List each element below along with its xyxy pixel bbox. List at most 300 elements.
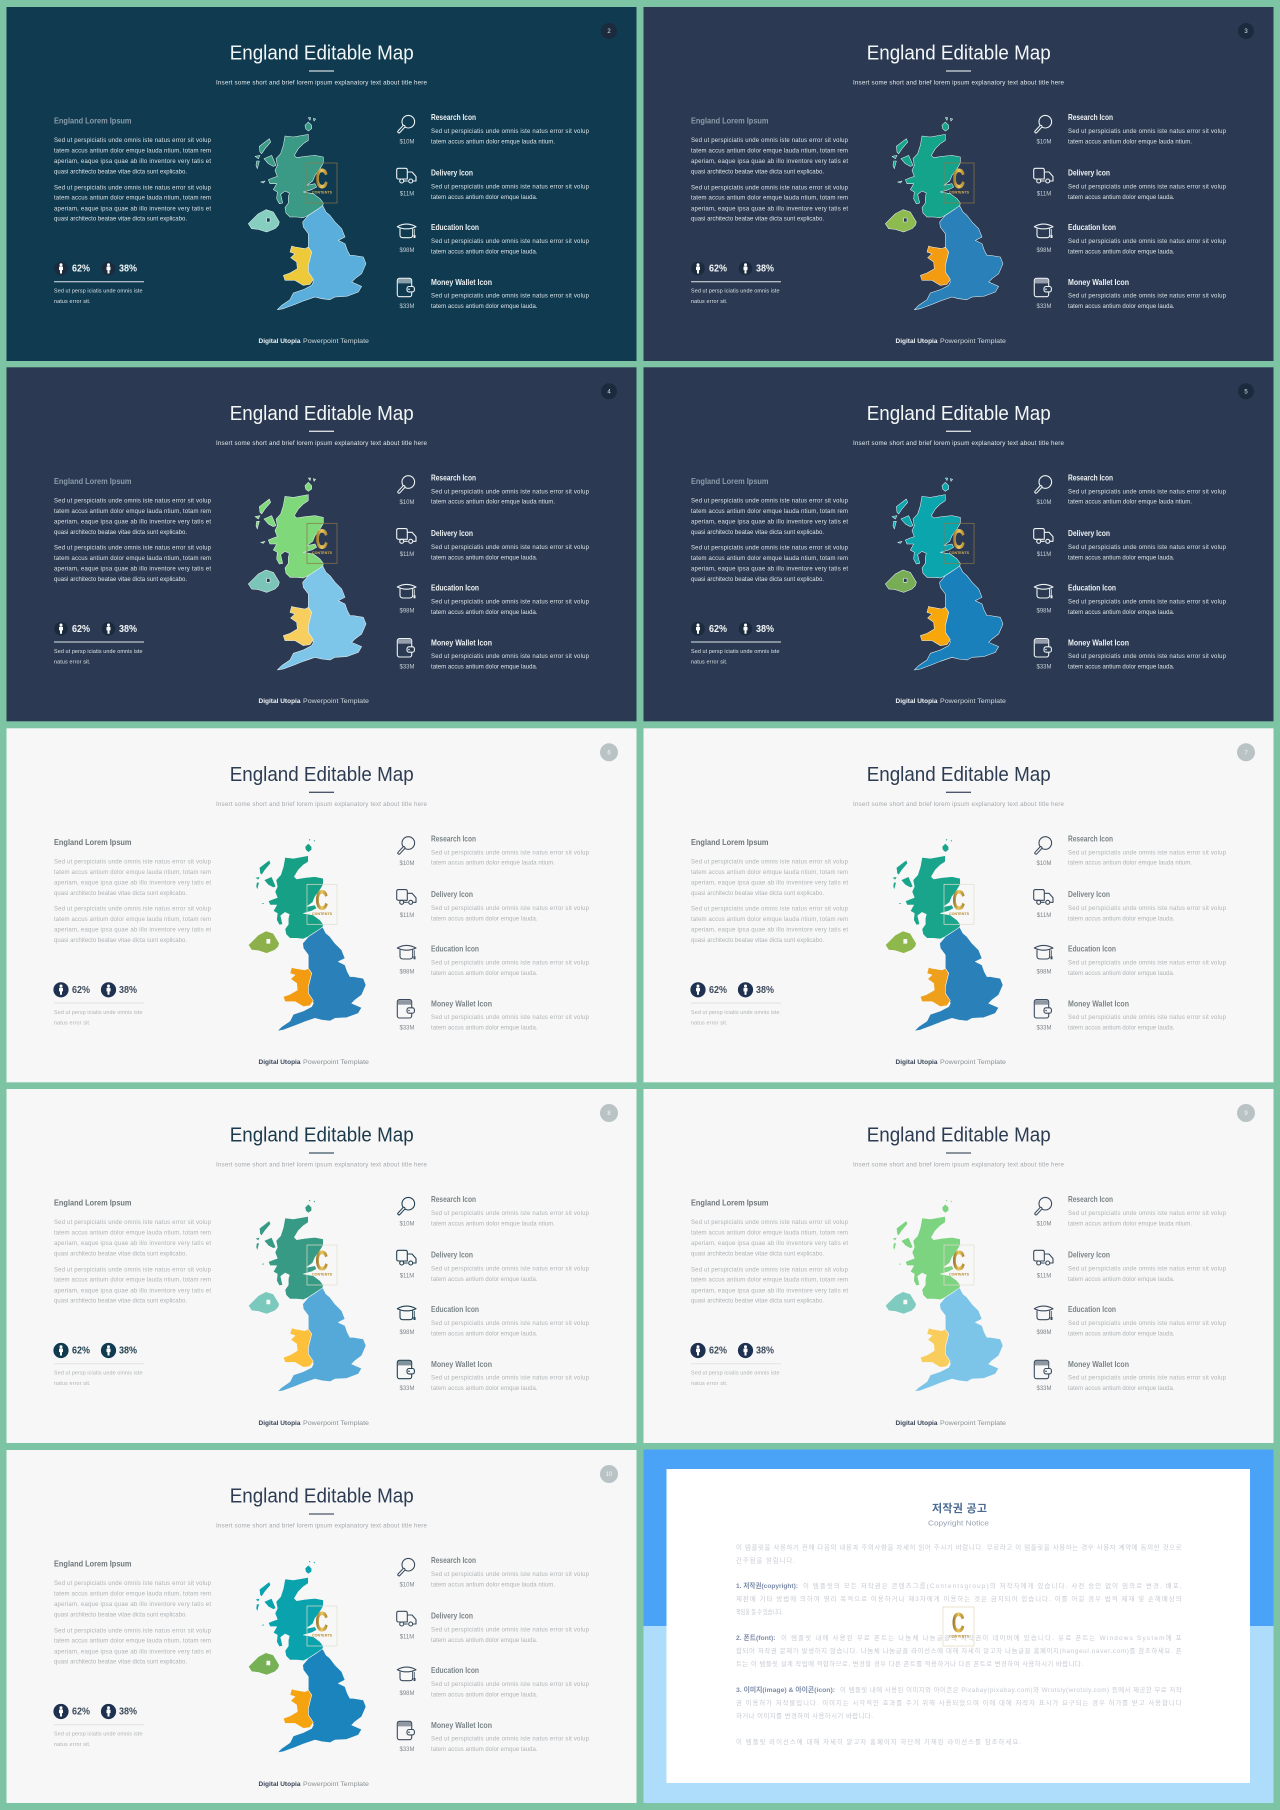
stats note: natus error sit. <box>691 299 728 305</box>
map of the UK <box>248 1561 366 1753</box>
footer: Powerpoint Template <box>303 1420 369 1427</box>
item: research: tatem accus antium dolor emque lauda ntium. <box>1068 1221 1192 1227</box>
item: education <box>397 1666 590 1699</box>
left paragraphs: quasi architecto beatae vitae dicta sunt explicabo. <box>691 891 824 897</box>
gender stats: 62% <box>709 262 728 274</box>
left paragraphs: Sed ut perspiciatis unde omnis iste natus error sit volup <box>54 1267 212 1273</box>
map of the UK <box>248 1200 366 1392</box>
stats note <box>54 649 142 665</box>
footer <box>896 338 1006 345</box>
left paragraphs: tatem accus antium dolor emque lauda ntium, totam rem <box>54 1639 211 1645</box>
item: education: Education Icon <box>431 583 479 592</box>
gender stats: 62% <box>709 623 728 635</box>
item: education: tatem accus antium dolor emque lauda. <box>431 1332 538 1338</box>
clause 2: font: 함되어 저작권 문제가 발생하지 않습니다. 나눔체 나눔글꼴 라이선스에 대해 자세히 알고자 나눔글꼴 홈페이지(hangeul.naver.com)를 참조하세요. 폰 <box>736 1646 1182 1655</box>
gender stats: 62% <box>72 262 91 274</box>
gender stats: 38% <box>119 1706 138 1718</box>
left paragraphs: aperiam, eaque ipsa quae ab illo inventore very tatis et <box>54 1288 211 1294</box>
footer: Powerpoint Template <box>303 338 369 345</box>
item: research: $10M <box>399 500 415 506</box>
item: delivery: tatem accus antium dolor emque lauda. <box>1068 916 1175 922</box>
stats note: Sed ut persp iciatis unde omnis iste <box>54 1370 142 1376</box>
clause 3: images and icons: 권 이용허가 저작물입니다. 이미지는 시각적인 효과를 주기 위해 사용되었으며 이에 대해 저작자 표시가 요구되는 경우 허가를 받고 사용합니다 <box>736 1698 1182 1707</box>
subtitle: Insert some short and brief lorem ipsum explanatory text about title here <box>853 1162 1065 1168</box>
item: delivery: Sed ut perspiciatis unde omnis iste natus error sit volup <box>1068 906 1227 912</box>
left paragraphs <box>691 859 849 944</box>
watermark <box>307 1606 337 1646</box>
watermark: CONTENTS <box>949 912 970 916</box>
page number badge <box>1238 23 1254 39</box>
item: delivery: tatem accus antium dolor emque lauda. <box>1068 555 1175 561</box>
gender stats: 38% <box>756 262 775 274</box>
page number badge: 3 <box>1244 29 1248 35</box>
item: money wallet <box>1034 278 1227 310</box>
watermark: CONTENTS <box>312 190 333 194</box>
item: research <box>1036 113 1227 146</box>
item: money wallet: Money Wallet Icon <box>431 1360 492 1369</box>
panel: slide 4, navy <box>6 367 636 721</box>
clause 3: images and icons: 하거나 이미지를 변경하여 사용하시기 바랍니다. <box>736 1711 873 1720</box>
watermark: C <box>316 1245 328 1276</box>
footer: Powerpoint Template <box>303 698 369 705</box>
watermark <box>307 523 337 563</box>
left paragraphs: aperiam, eaque ipsa quae ab illo inventore very tatis et <box>54 880 211 886</box>
left heading: England Lorem Ipsum <box>54 116 132 126</box>
footer: Powerpoint Template <box>940 698 1006 705</box>
left paragraphs: Sed ut perspiciatis unde omnis iste natus error sit volup <box>691 138 849 144</box>
footer: Digital Utopia <box>258 1781 301 1788</box>
left paragraphs: quasi architecto beatae vitae dicta sunt explicabo. <box>691 170 824 176</box>
watermark <box>943 1607 974 1646</box>
item: education: tatem accus antium dolor emque lauda. <box>1068 1332 1175 1338</box>
item: education: Sed ut perspiciatis unde omnis iste natus error sit volup <box>431 239 590 245</box>
watermark: C <box>316 884 328 915</box>
watermark: CONTENTS <box>949 551 970 555</box>
item: delivery: tatem accus antium dolor emque lauda. <box>431 555 538 561</box>
left paragraphs: tatem accus antium dolor emque lauda ntium, totam rem <box>691 870 848 876</box>
item: research <box>399 473 590 506</box>
gender stats <box>54 262 138 275</box>
item: research: $10M <box>399 140 415 146</box>
left paragraphs: quasi architecto beatae vitae dicta sunt explicabo. <box>54 170 187 176</box>
item: delivery: $11M <box>1037 552 1051 558</box>
gender stats <box>691 622 775 636</box>
item: delivery: tatem accus antium dolor emque lauda. <box>431 916 538 922</box>
left paragraphs: tatem accus antium dolor emque lauda ntium, totam rem <box>54 556 211 562</box>
gender stats: 38% <box>756 623 775 635</box>
left paragraphs: Sed ut perspiciatis unde omnis iste natus error sit volup <box>54 546 212 552</box>
gender stats <box>690 1343 775 1358</box>
watermark: CONTENTS <box>949 1634 970 1638</box>
item: delivery: $11M <box>400 552 414 558</box>
item: delivery: Sed ut perspiciatis unde omnis iste natus error sit volup <box>431 906 590 912</box>
map of the UK <box>248 478 366 670</box>
item: delivery <box>397 890 590 922</box>
item: research: Sed ut perspiciatis unde omnis iste natus error sit volup <box>1068 1211 1227 1217</box>
stats note: Sed ut persp iciatis unde omnis iste <box>691 1370 780 1376</box>
copyright subheading: Copyright Notice <box>928 1518 989 1528</box>
left paragraphs: aperiam, eaque ipsa quae ab illo inventore very tatis et <box>691 519 848 525</box>
left paragraphs <box>54 498 212 583</box>
gender stats <box>53 1704 138 1719</box>
item: research <box>1036 473 1227 506</box>
left paragraphs: quasi architecto beatae vitae dicta sunt explicabo. <box>54 217 187 223</box>
left paragraphs: Sed ut perspiciatis unde omnis iste natus error sit volup <box>691 859 849 865</box>
item: money wallet: Sed ut perspiciatis unde omnis iste natus error sit volup <box>431 1015 590 1021</box>
clause 1: copyright: 이 템플릿의 모든 저작권은 콘텐츠그룹(Contentsgroup)의 저작자에게 있습니다. 사전 승인 없이 임의로 변경, 배포, <box>803 1581 1182 1590</box>
page number badge <box>600 1465 618 1483</box>
left paragraphs: aperiam, eaque ipsa quae ab illo inventore very tatis et <box>691 1288 848 1294</box>
panel: slide 7, light <box>644 728 1274 1082</box>
left paragraphs: Sed ut perspiciatis unde omnis iste natus error sit volup <box>691 1267 849 1273</box>
left paragraphs: aperiam, eaque ipsa quae ab illo inventore very tatis et <box>54 1649 211 1655</box>
item: money wallet: Sed ut perspiciatis unde omnis iste natus error sit volup <box>431 294 590 300</box>
footer: Digital Utopia <box>896 1059 938 1066</box>
item: education: tatem accus antium dolor emque lauda. <box>1068 610 1175 616</box>
item: delivery <box>397 529 590 561</box>
stats note: natus error sit. <box>54 659 90 665</box>
item: education <box>1034 584 1227 616</box>
left paragraphs: quasi architecto beatae vitae dicta sunt explicabo. <box>691 577 824 583</box>
title: England Editable Map <box>230 763 414 786</box>
item: money wallet <box>397 1360 590 1392</box>
item: research: $10M <box>1036 140 1052 146</box>
item: money wallet <box>397 1000 590 1031</box>
left paragraphs: Sed ut perspiciatis unde omnis iste natus error sit volup <box>54 185 212 191</box>
item: education: Education Icon <box>431 223 479 232</box>
left paragraphs: quasi architecto beatae vitae dicta sunt explicabo. <box>54 577 187 583</box>
left paragraphs: Sed ut perspiciatis unde omnis iste natus error sit volup <box>691 498 849 504</box>
stats note: Sed ut persp iciatis unde omnis iste <box>54 1010 142 1016</box>
item: delivery: $11M <box>1037 1274 1051 1280</box>
item: delivery: Delivery Icon <box>1068 529 1110 538</box>
stats note: Sed ut persp iciatis unde omnis iste <box>54 649 142 655</box>
intro text: 이 템플릿을 사용하기 전에 다음의 내용과 주의사항을 자세히 읽어 주시기 바랍니다. 무료라고 이 템플릿을 사용하는 경우 사용자 계약에 동의한 것으로 <box>736 1542 1182 1552</box>
left paragraphs: tatem accus antium dolor emque lauda ntium, totam rem <box>54 196 211 202</box>
item: education: tatem accus antium dolor emque lauda. <box>431 250 538 256</box>
watermark <box>307 1245 337 1285</box>
item: money wallet: tatem accus antium dolor emque lauda. <box>431 304 538 310</box>
copyright heading: 저작권 공고 <box>932 1501 987 1515</box>
item: research: Research Icon <box>431 473 476 482</box>
item: money wallet <box>397 1721 590 1753</box>
footer <box>896 1420 1006 1427</box>
item: research <box>399 1556 590 1588</box>
title: England Editable Map <box>867 42 1051 64</box>
item: research: $10M <box>1036 861 1052 867</box>
left paragraphs: quasi architecto beatae vitae dicta sunt explicabo. <box>54 1613 187 1619</box>
left paragraphs: aperiam, eaque ipsa quae ab illo inventore very tatis et <box>54 519 211 525</box>
stats note: Sed ut persp iciatis unde omnis iste <box>54 288 142 294</box>
item: money wallet: tatem accus antium dolor emque lauda. <box>431 664 538 670</box>
item: education: tatem accus antium dolor emque lauda. <box>1068 250 1175 256</box>
item: research: tatem accus antium dolor emque lauda ntium. <box>431 500 555 506</box>
map of the UK <box>885 839 1003 1031</box>
item: delivery <box>397 1611 590 1644</box>
title: England Editable Map <box>867 1124 1051 1146</box>
watermark: C <box>952 1245 965 1276</box>
item: delivery: Delivery Icon <box>1068 1250 1110 1260</box>
item: money wallet: $33M <box>1036 1386 1052 1392</box>
left paragraphs: aperiam, eaque ipsa quae ab illo inventore very tatis et <box>691 159 848 165</box>
item: money wallet: tatem accus antium dolor emque lauda. <box>1068 664 1175 670</box>
item: research: $10M <box>399 861 415 867</box>
left heading: England Lorem Ipsum <box>691 116 768 126</box>
subtitle: Insert some short and brief lorem ipsum explanatory text about title here <box>853 80 1065 86</box>
page number badge: 4 <box>607 389 611 395</box>
left paragraphs: quasi architecto beatae vitae dicta sunt explicabo. <box>691 217 824 223</box>
footer <box>258 338 369 345</box>
gender stats <box>691 262 775 275</box>
item: delivery: Delivery Icon <box>431 529 473 538</box>
item: education <box>1034 1305 1227 1338</box>
title: England Editable Map <box>230 1484 414 1508</box>
watermark: C <box>316 1606 328 1637</box>
subtitle: Insert some short and brief lorem ipsum explanatory text about title here <box>216 801 428 808</box>
item: delivery: Sed ut perspiciatis unde omnis iste natus error sit volup <box>1068 185 1227 191</box>
stats note <box>54 1370 142 1387</box>
gender stats <box>54 622 138 636</box>
footer <box>258 1059 369 1066</box>
footer <box>896 698 1006 705</box>
footer: Digital Utopia <box>258 1059 301 1066</box>
stats note <box>54 1010 142 1026</box>
left heading: England Lorem Ipsum <box>54 1198 132 1208</box>
item: money wallet: Money Wallet Icon <box>1068 1000 1129 1008</box>
stats note: natus error sit. <box>691 1020 728 1026</box>
left paragraphs: aperiam, eaque ipsa quae ab illo inventore very tatis et <box>54 206 211 212</box>
item: money wallet: tatem accus antium dolor emque lauda. <box>1068 304 1175 310</box>
item: money wallet <box>397 638 590 670</box>
left paragraphs <box>691 498 849 583</box>
left paragraphs: Sed ut perspiciatis unde omnis iste natus error sit volup <box>691 185 849 191</box>
item: education: tatem accus antium dolor emque lauda. <box>1068 971 1175 977</box>
item: education: $98M <box>1036 248 1052 254</box>
item: delivery <box>397 1250 590 1283</box>
left heading: England Lorem Ipsum <box>691 476 768 486</box>
item: education: tatem accus antium dolor emque lauda. <box>431 610 538 616</box>
page number badge: 2 <box>607 29 611 35</box>
item: research: $10M <box>1036 1222 1052 1228</box>
footer: Digital Utopia <box>258 1420 301 1427</box>
item: research: tatem accus antium dolor emque lauda ntium. <box>1068 139 1192 145</box>
item: delivery <box>1034 1250 1227 1283</box>
gender stats: 62% <box>72 984 91 996</box>
footer: Digital Utopia <box>896 698 938 705</box>
item: delivery: Delivery Icon <box>431 890 473 899</box>
item: education <box>397 584 590 616</box>
stats note: Sed ut persp iciatis unde omnis iste <box>691 649 780 655</box>
item: money wallet: Money Wallet Icon <box>431 278 492 287</box>
item: delivery: Sed ut perspiciatis unde omnis iste natus error sit volup <box>1068 1267 1227 1273</box>
gender stats <box>690 982 775 997</box>
subtitle: Insert some short and brief lorem ipsum explanatory text about title here <box>216 1522 428 1530</box>
item: money wallet: $33M <box>399 1386 415 1392</box>
item: money wallet: Sed ut perspiciatis unde omnis iste natus error sit volup <box>1068 1015 1227 1021</box>
item: money wallet: $33M <box>399 1025 415 1031</box>
item: research: tatem accus antium dolor emque lauda ntium. <box>431 1582 555 1588</box>
map of the UK <box>248 118 366 310</box>
clause 3: images and icons: 이 템플릿 내에 사용된 이미지와 아이콘은 Pixabay(pixabay.com)와 Wrotsly(wrotsly.com) 등에서 제공한 무료 저작 <box>840 1685 1182 1694</box>
item: education: $98M <box>1036 1330 1052 1336</box>
left heading: England Lorem Ipsum <box>691 1198 768 1208</box>
item: delivery: $11M <box>1037 192 1051 198</box>
item: research: Research Icon <box>431 834 476 843</box>
item: delivery: Delivery Icon <box>431 1250 473 1260</box>
page number badge <box>601 383 617 399</box>
gender stats: 38% <box>119 623 138 635</box>
item: money wallet: $33M <box>399 1747 415 1753</box>
item: education <box>1034 944 1227 977</box>
footer <box>896 1059 1006 1066</box>
item: delivery <box>1034 890 1227 922</box>
gender stats: 38% <box>119 1344 138 1356</box>
left paragraphs: quasi architecto beatae vitae dicta sunt explicabo. <box>691 938 824 944</box>
left paragraphs: quasi architecto beatae vitae dicta sunt explicabo. <box>54 1660 187 1666</box>
left paragraphs: aperiam, eaque ipsa quae ab illo inventore very tatis et <box>54 159 211 165</box>
watermark: C <box>952 163 965 194</box>
subtitle: Insert some short and brief lorem ipsum explanatory text about title here <box>216 440 428 447</box>
watermark <box>944 523 974 563</box>
page number badge <box>1238 383 1254 399</box>
left paragraphs: quasi architecto beatae vitae dicta sunt explicabo. <box>54 1299 187 1305</box>
footer: Digital Utopia <box>258 338 301 345</box>
item: delivery: Sed ut perspiciatis unde omnis iste natus error sit volup <box>431 545 590 551</box>
footer <box>258 1781 369 1788</box>
item: money wallet: tatem accus antium dolor emque lauda. <box>431 1025 538 1031</box>
left paragraphs <box>54 859 212 944</box>
item: education: Education Icon <box>1068 1305 1116 1314</box>
item: delivery: Sed ut perspiciatis unde omnis iste natus error sit volup <box>431 1267 590 1273</box>
item: money wallet: Money Wallet Icon <box>431 1000 492 1008</box>
item: education: Sed ut perspiciatis unde omnis iste natus error sit volup <box>1068 599 1227 605</box>
left paragraphs: quasi architecto beatae vitae dicta sunt explicabo. <box>691 530 824 536</box>
item: education <box>397 1305 590 1338</box>
clause 1: copyright <box>736 1581 1182 1616</box>
item: education <box>397 944 590 977</box>
subtitle: Insert some short and brief lorem ipsum explanatory text about title here <box>216 80 428 86</box>
subtitle: Insert some short and brief lorem ipsum explanatory text about title here <box>853 440 1065 447</box>
map of the UK <box>885 478 1003 670</box>
gender stats: 38% <box>756 1344 775 1356</box>
left heading: England Lorem Ipsum <box>54 837 132 847</box>
stats note: natus error sit. <box>54 1742 90 1748</box>
footer: Powerpoint Template <box>303 1781 369 1788</box>
clause 1: copyright: 1. 저작권(copyright): <box>736 1581 798 1590</box>
item: money wallet: $33M <box>399 304 415 310</box>
item: money wallet: Sed ut perspiciatis unde omnis iste natus error sit volup <box>431 1376 590 1382</box>
item: research <box>1036 834 1227 867</box>
item: education: Education Icon <box>1068 223 1116 232</box>
left paragraphs <box>691 1220 849 1305</box>
left paragraphs: Sed ut perspiciatis unde omnis iste natus error sit volup <box>691 1220 849 1226</box>
left paragraphs: quasi architecto beatae vitae dicta sunt explicabo. <box>54 938 187 944</box>
item: delivery <box>397 168 590 201</box>
map of the UK <box>885 118 1003 310</box>
left paragraphs: tatem accus antium dolor emque lauda ntium, totam rem <box>691 917 848 923</box>
watermark <box>944 1245 974 1285</box>
item: money wallet: $33M <box>399 664 415 670</box>
item: money wallet: $33M <box>1036 304 1052 310</box>
left paragraphs: aperiam, eaque ipsa quae ab illo inventore very tatis et <box>54 1602 211 1608</box>
left paragraphs: Sed ut perspiciatis unde omnis iste natus error sit volup <box>54 1220 212 1226</box>
watermark: C <box>952 1607 964 1638</box>
gender stats <box>53 982 138 997</box>
page number badge <box>600 1104 618 1122</box>
stats note <box>54 288 142 305</box>
item: money wallet: tatem accus antium dolor emque lauda. <box>431 1747 538 1753</box>
item: money wallet: Sed ut perspiciatis unde omnis iste natus error sit volup <box>431 654 590 660</box>
page number badge <box>601 23 617 39</box>
item: education: Sed ut perspiciatis unde omnis iste natus error sit volup <box>1068 960 1227 966</box>
item: research: tatem accus antium dolor emque lauda ntium. <box>1068 861 1192 867</box>
item: research: Sed ut perspiciatis unde omnis iste natus error sit volup <box>1068 129 1227 135</box>
gender stats: 38% <box>756 984 775 996</box>
title: England Editable Map <box>230 42 414 64</box>
intro text: 간주됨을 알립니다. <box>736 1556 795 1564</box>
item: research: Sed ut perspiciatis unde omnis iste natus error sit volup <box>431 1211 590 1217</box>
left paragraphs: quasi architecto beatae vitae dicta sunt explicabo. <box>691 1252 824 1258</box>
stats note <box>691 649 780 665</box>
item: delivery <box>1034 168 1227 201</box>
clause 2: font: 2. 폰트(font): <box>736 1634 776 1642</box>
item: money wallet: Sed ut perspiciatis unde omnis iste natus error sit volup <box>1068 654 1227 660</box>
item: research: Research Icon <box>1068 473 1113 482</box>
item: delivery: Sed ut perspiciatis unde omnis iste natus error sit volup <box>431 1628 590 1634</box>
item: research <box>399 1195 590 1228</box>
watermark <box>944 884 974 924</box>
subtitle: Insert some short and brief lorem ipsum explanatory text about title here <box>853 801 1065 808</box>
item: delivery: $11M <box>400 1274 414 1280</box>
left paragraphs: tatem accus antium dolor emque lauda ntium, totam rem <box>54 1278 211 1284</box>
watermark: CONTENTS <box>949 190 970 194</box>
watermark: C <box>316 523 328 554</box>
gender stats: 62% <box>72 1706 91 1718</box>
item: research: tatem accus antium dolor emque lauda ntium. <box>431 1221 555 1227</box>
left paragraphs: Sed ut perspiciatis unde omnis iste natus error sit volup <box>54 1628 212 1634</box>
left paragraphs: tatem accus antium dolor emque lauda ntium, totam rem <box>691 149 848 155</box>
intro text <box>736 1542 1182 1564</box>
item: money wallet: tatem accus antium dolor emque lauda. <box>431 1386 538 1392</box>
left heading: England Lorem Ipsum <box>691 837 768 847</box>
item: money wallet <box>1034 638 1227 670</box>
left paragraphs: tatem accus antium dolor emque lauda ntium, totam rem <box>691 509 848 515</box>
page number badge: 8 <box>607 1111 611 1117</box>
item: research: tatem accus antium dolor emque lauda ntium. <box>431 861 555 867</box>
item: education: Sed ut perspiciatis unde omnis iste natus error sit volup <box>1068 1321 1227 1327</box>
item: education <box>397 223 590 256</box>
item: education: Sed ut perspiciatis unde omnis iste natus error sit volup <box>1068 239 1227 245</box>
left paragraphs: tatem accus antium dolor emque lauda ntium, totam rem <box>54 917 211 923</box>
watermark: C <box>952 523 965 554</box>
item: research: Research Icon <box>1068 834 1113 843</box>
item: delivery: tatem accus antium dolor emque lauda. <box>431 1277 538 1283</box>
item: money wallet <box>397 278 590 310</box>
page number badge: 9 <box>1244 1111 1248 1117</box>
left paragraphs: tatem accus antium dolor emque lauda ntium, totam rem <box>54 1592 211 1598</box>
item: research: Sed ut perspiciatis unde omnis iste natus error sit volup <box>431 850 590 856</box>
item: education: Sed ut perspiciatis unde omnis iste natus error sit volup <box>431 1682 590 1688</box>
footer: Digital Utopia <box>258 698 301 705</box>
closing text: 이 템플릿 라이선스에 대해 자세히 알고자 홈페이지 하단에 기재된 라이선스를 참조하세요. <box>736 1737 1021 1746</box>
left paragraphs <box>54 1220 212 1305</box>
left paragraphs: tatem accus antium dolor emque lauda ntium, totam rem <box>54 149 211 155</box>
left paragraphs: tatem accus antium dolor emque lauda ntium, totam rem <box>691 1278 848 1284</box>
left paragraphs: aperiam, eaque ipsa quae ab illo inventore very tatis et <box>54 567 211 573</box>
item: money wallet: $33M <box>1036 664 1052 670</box>
watermark <box>307 163 337 203</box>
footer: Digital Utopia <box>896 338 938 345</box>
